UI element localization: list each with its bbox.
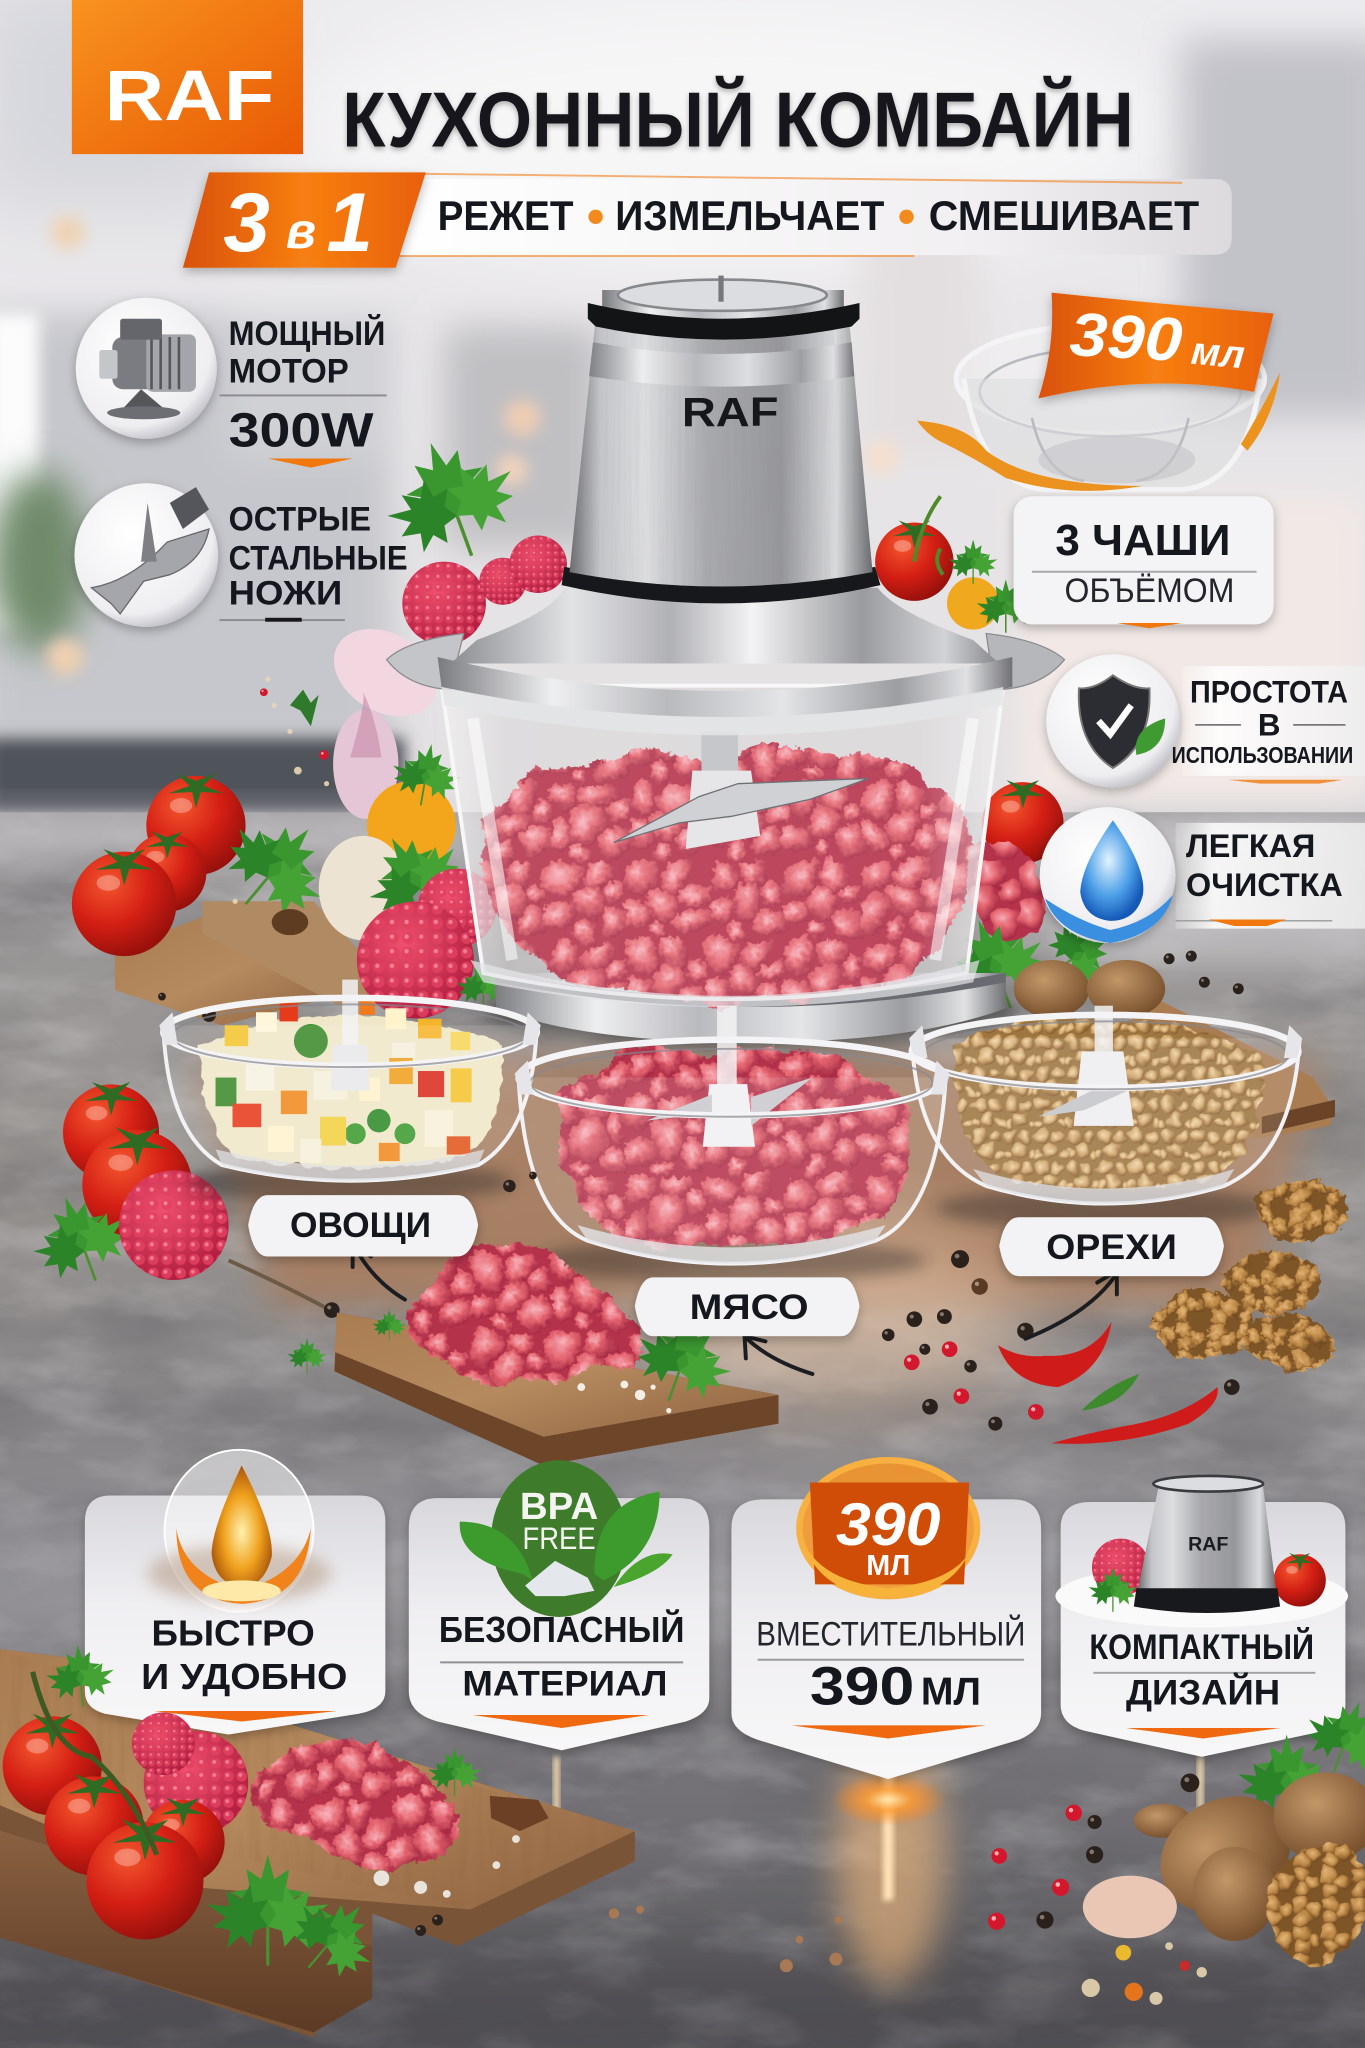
icon: BPA free badge bbox=[460, 1460, 673, 1617]
text: КОМПАКТНЫЙ bbox=[1089, 1627, 1314, 1667]
badge text: 3 bbox=[223, 175, 270, 269]
banner text: РЕЖЕТ bbox=[438, 192, 574, 239]
icon: mini chopper bbox=[1084, 1476, 1326, 1613]
card bbox=[1182, 666, 1365, 776]
ribbon text: мл bbox=[1189, 330, 1246, 377]
motor text: 300W bbox=[229, 404, 374, 458]
accent bbox=[792, 1725, 986, 1738]
card: fast and convenient: И УДОБНО bbox=[141, 1656, 347, 1697]
banner text bbox=[438, 192, 1200, 239]
knives text: СТАЛЬНЫЕ bbox=[229, 539, 408, 577]
card: compact design: ДИЗАЙН bbox=[1126, 1672, 1280, 1712]
cleaning text bbox=[1176, 827, 1343, 926]
icon: BPA free badge: FREE bbox=[522, 1521, 596, 1556]
badge text: в bbox=[286, 203, 316, 259]
product: glass chopper bbox=[387, 276, 1065, 1046]
icon: 390 badge bbox=[797, 1460, 980, 1596]
glow reflection under card bbox=[554, 1724, 1203, 1985]
label: мясо: МЯСО bbox=[690, 1288, 809, 1327]
feature: knives bbox=[74, 483, 408, 627]
card: safe material: МАТЕРИАЛ bbox=[462, 1664, 667, 1703]
text: БЫСТРО bbox=[152, 1613, 315, 1654]
motor text: МОЩНЫЙ bbox=[229, 314, 385, 353]
arrow: орехи bbox=[1025, 1271, 1117, 1339]
cleaning text: ОЧИСТКА bbox=[1186, 866, 1343, 903]
foods behind product: right bbox=[875, 496, 1244, 1029]
icon: shield bbox=[1046, 654, 1180, 788]
cutting boards behind bowls bbox=[115, 901, 1335, 1139]
card: capacity: МЛ bbox=[921, 1670, 981, 1713]
knives text: ОСТРЫЕ bbox=[229, 500, 371, 538]
bowl: vegetables bbox=[159, 980, 541, 1203]
icon: mini chopper: RAF bbox=[1188, 1533, 1228, 1555]
icon: 390 badge: 390 bbox=[836, 1491, 940, 1558]
arrows to food labels bbox=[353, 1245, 1117, 1374]
motor text bbox=[219, 294, 387, 468]
title: КУХОННЫЙ КОМБАЙН bbox=[342, 75, 1134, 163]
arrow: овощи bbox=[353, 1245, 405, 1300]
glass bowl with meat bbox=[442, 686, 1003, 1007]
card: 3 bowls: 3 ЧАШИ bbox=[1055, 517, 1230, 565]
card: capacity: 390 bbox=[810, 1657, 914, 1716]
logo bbox=[72, 0, 303, 154]
top cap bbox=[588, 276, 859, 340]
ribbon text: 390 bbox=[1068, 300, 1184, 375]
cutting board with meat bbox=[334, 1241, 779, 1465]
accent bbox=[473, 1715, 649, 1728]
card: capacity bbox=[731, 1460, 1041, 1779]
ease text: ПРОСТОТА bbox=[1190, 675, 1348, 710]
feature: ease of use bbox=[1046, 654, 1365, 788]
accent bbox=[1126, 1728, 1280, 1738]
badge text bbox=[223, 175, 373, 269]
orange badge bbox=[183, 172, 426, 268]
banner text: ИЗМЕЛЬЧАЕТ bbox=[615, 192, 885, 239]
podium bbox=[1055, 1565, 1348, 1627]
steel base bbox=[483, 973, 1019, 1046]
label: мясо bbox=[635, 1277, 859, 1336]
blade bbox=[614, 731, 869, 849]
bowl: nuts bbox=[909, 1006, 1302, 1229]
icon: BPA free badge: BPA bbox=[520, 1486, 598, 1528]
knives text bbox=[219, 500, 408, 622]
background: blurred kitchen bbox=[0, 0, 1365, 836]
oil splash bbox=[917, 372, 1280, 491]
text: ВМЕСТИТЕЛЬНЫЙ bbox=[756, 1616, 1025, 1654]
cleaning text: ЛЕГКАЯ bbox=[1186, 827, 1315, 864]
bottom-left: tomatoes and meat bbox=[3, 1641, 843, 2001]
banner text: СМЕШИВАЕТ bbox=[929, 192, 1200, 239]
bottom-right: nuts and spices bbox=[988, 1685, 1365, 2005]
banner bar bbox=[392, 179, 1232, 256]
feature: easy cleaning bbox=[1040, 807, 1365, 943]
motor logo: RAF bbox=[682, 389, 779, 435]
background: marble counter bbox=[0, 812, 1365, 2048]
card bbox=[1176, 823, 1365, 929]
motor text: МОТОР bbox=[229, 353, 349, 391]
icon: oil drop bbox=[148, 1450, 330, 1612]
black collar bbox=[562, 567, 880, 603]
orange ribbon bbox=[1038, 293, 1274, 398]
feature: motor bbox=[76, 294, 387, 468]
icon: motor bbox=[76, 298, 217, 439]
motor body bbox=[570, 319, 873, 586]
card: safe material bbox=[409, 1460, 709, 1750]
label: орехи: ОРЕХИ bbox=[1046, 1228, 1177, 1267]
icon: 390 badge: МЛ bbox=[866, 1550, 910, 1582]
feature: 390 ml bowl bbox=[917, 293, 1280, 628]
logo: RAF bbox=[104, 56, 274, 136]
spices and walnuts right bbox=[503, 1172, 1348, 1444]
text: БЕЗОПАСНЫЙ bbox=[439, 1608, 684, 1650]
card: compact design bbox=[1055, 1476, 1348, 1757]
label: овощи: ОВОЩИ bbox=[290, 1206, 431, 1245]
knives text: НОЖИ bbox=[229, 575, 342, 613]
icon: blade bbox=[74, 483, 218, 627]
lid with handles bbox=[387, 588, 1065, 735]
accent bbox=[154, 1711, 337, 1721]
bowl: meat bbox=[515, 1006, 950, 1281]
foods in front: left cluster bbox=[11, 993, 374, 1374]
banner: 3 in 1 bbox=[183, 172, 1232, 269]
card: fast and convenient bbox=[85, 1450, 385, 1735]
glass bowl bbox=[956, 324, 1264, 490]
ease text bbox=[1172, 675, 1353, 784]
label: орехи bbox=[999, 1217, 1224, 1276]
icon: water drop bbox=[1040, 807, 1176, 943]
badge text: 1 bbox=[327, 175, 373, 269]
ease text: В bbox=[1258, 707, 1281, 742]
ribbon text bbox=[1068, 300, 1246, 377]
label: овощи bbox=[248, 1195, 478, 1256]
foods behind product: left bbox=[72, 416, 567, 1019]
card: 3 bowls: ОБЪЁМОМ bbox=[1065, 572, 1234, 610]
arrow: мясо bbox=[745, 1336, 812, 1374]
card: 3 bowls bbox=[1014, 496, 1274, 628]
bottom-left wooden boards bbox=[0, 1648, 635, 2038]
